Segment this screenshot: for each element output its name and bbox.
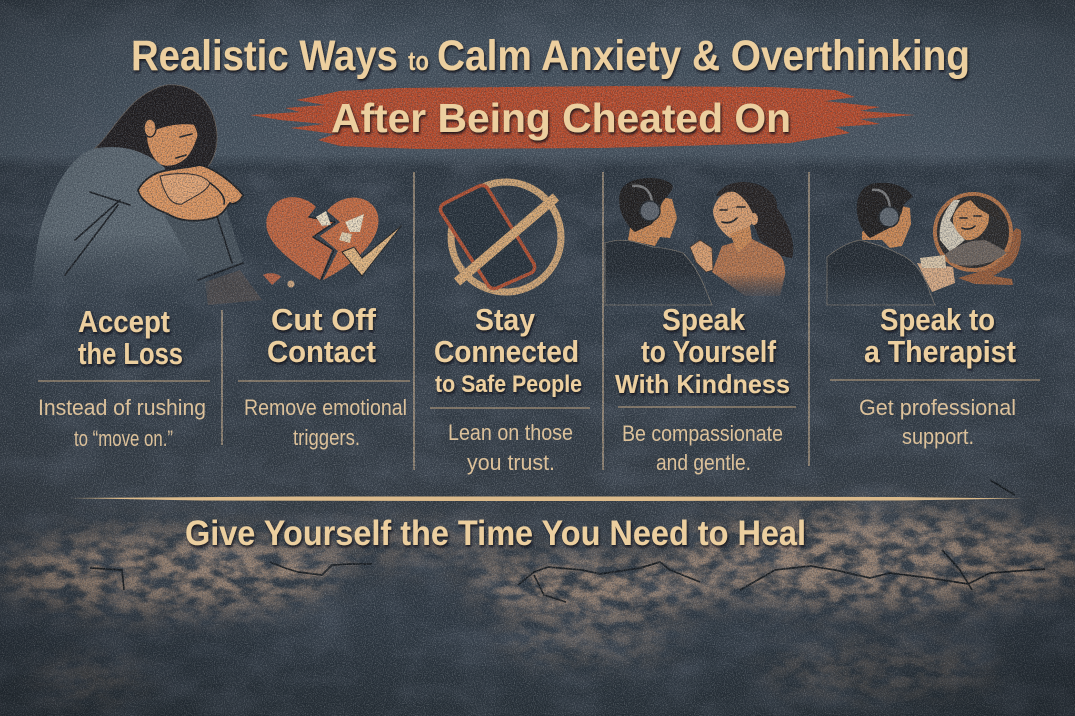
arms [138, 165, 243, 221]
heading: a Therapist [864, 334, 1016, 369]
heading [615, 302, 790, 399]
heart shards [316, 211, 331, 226]
man body [827, 240, 935, 305]
title: to [408, 46, 429, 76]
left heart half [266, 197, 335, 280]
headphones [872, 190, 890, 207]
heading: Cut Off [271, 302, 377, 337]
illustration: woman hugging knees [30, 85, 262, 305]
illustration: man and woman talking [605, 178, 793, 305]
heading: Speak to [880, 302, 995, 337]
ground patch [205, 270, 262, 305]
mirror reflection [953, 200, 989, 240]
man hair [619, 178, 673, 232]
description [859, 395, 1016, 449]
man hair [857, 183, 913, 238]
description: Be compassionate [622, 421, 783, 446]
heading: Stay [475, 302, 536, 337]
small fragments [263, 273, 281, 285]
closing rule [70, 496, 1022, 501]
description: Remove emotional [244, 395, 407, 420]
description: to “move on.” [74, 426, 173, 451]
woman neck [730, 226, 752, 253]
headphones [632, 186, 652, 204]
icon: broken heart with check mark [263, 197, 402, 288]
man neck and face [628, 197, 677, 246]
surface cracks [90, 480, 1045, 602]
heading: Contact [267, 334, 376, 369]
mirror left highlight [940, 200, 965, 252]
mirror stand [958, 228, 1021, 285]
heading: Connected [434, 334, 579, 369]
heading: to Safe People [435, 371, 582, 398]
man body [605, 240, 712, 305]
man neck and face [862, 205, 911, 248]
woman hair [716, 182, 793, 258]
description [244, 395, 407, 450]
heading: With Kindness [615, 369, 790, 399]
description [448, 420, 573, 475]
heading: Speak [662, 302, 746, 337]
hair back [84, 85, 217, 175]
title: Calm Anxiety & Overthinking [437, 32, 970, 80]
subtitle: After Being Cheated On [331, 95, 791, 141]
title: Realistic Ways [131, 32, 398, 80]
heading [267, 302, 377, 369]
heading: to Yourself [641, 334, 777, 369]
description: Lean on those [448, 420, 573, 445]
mirror [935, 194, 1011, 270]
heading [78, 304, 183, 371]
step 3: stay connected [430, 302, 590, 475]
check mark [342, 225, 402, 276]
step 4: speak to yourself [615, 302, 796, 475]
step 2: cut off contact [238, 302, 410, 450]
description: Instead of rushing [38, 395, 206, 420]
heading: the Loss [78, 336, 183, 371]
step 5: speak to a therapist [830, 302, 1040, 449]
description: you trust. [467, 450, 555, 475]
illustration: man with mirror [827, 183, 1021, 305]
sweater body [30, 147, 210, 305]
woman face [713, 192, 755, 238]
slash [457, 197, 556, 282]
closing message: Give Yourself the Time You Need to Heal [185, 514, 806, 553]
face [147, 124, 200, 166]
icon: phone with prohibition sign [440, 182, 561, 292]
shin [164, 205, 243, 277]
title [131, 32, 970, 80]
heading: Accept [78, 304, 170, 339]
description: Get professional [859, 395, 1016, 420]
column dividers [222, 172, 809, 470]
description: triggers. [293, 425, 360, 450]
subtitle banner brush stroke [250, 86, 915, 149]
ring [451, 182, 561, 292]
heading [434, 302, 582, 398]
paper in hand [917, 263, 955, 292]
hair front [150, 105, 210, 172]
woman hands [690, 240, 713, 272]
phone [440, 185, 535, 289]
woman sweater [712, 238, 785, 296]
step 1: accept the loss [38, 304, 210, 451]
right heart half [320, 198, 378, 280]
description: and gentle. [656, 450, 751, 475]
heading [864, 302, 1016, 369]
description [622, 421, 783, 475]
description [38, 395, 206, 451]
description: support. [902, 424, 974, 449]
